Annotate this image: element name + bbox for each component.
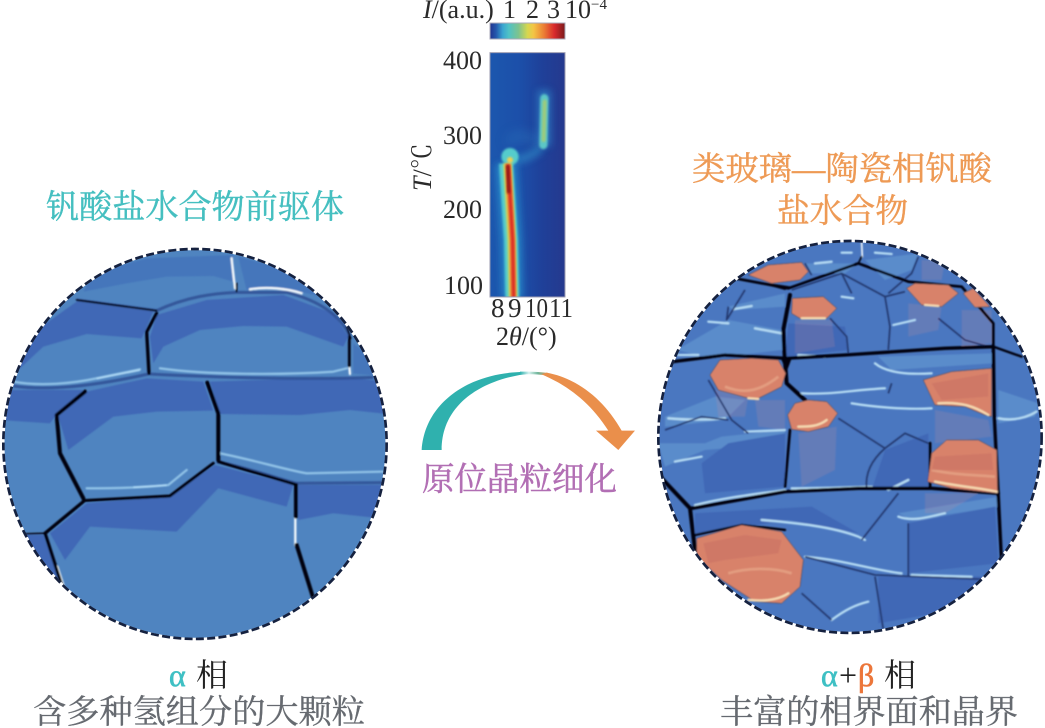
left caption: alpha phase: [33, 657, 365, 728]
x axis labels: 2θ/(°): [496, 322, 557, 351]
process label: 原位晶粒细化: [422, 461, 617, 498]
right title: [692, 151, 993, 230]
bright grain rims: [13, 368, 383, 488]
x axis labels: 10: [525, 293, 548, 323]
right caption: alpha+beta phase: 相: [884, 657, 916, 693]
y axis labels: [408, 46, 483, 300]
y axis labels: 200: [443, 195, 482, 224]
left caption: alpha phase: 相: [196, 657, 228, 693]
arrow: curved teal to orange: [422, 372, 635, 450]
colorbar legend: [422, 0, 607, 39]
black grain boundaries: [25, 283, 351, 598]
heatmap chart: [408, 46, 565, 300]
x axis labels: 11: [549, 293, 573, 323]
right caption: alpha+beta phase: [720, 657, 1018, 728]
black grain boundaries: [662, 257, 1022, 563]
x axis labels: [491, 293, 573, 351]
right title: 盐水合物: [777, 193, 908, 230]
panel: alpha phase large grains circle: [0, 248, 390, 640]
shaded edges below grains: [13, 292, 383, 483]
translucent pink shafts below beta grains: [715, 260, 992, 513]
panel: alpha+beta refined grains circle: [658, 240, 1042, 640]
darker grain facets: [0, 295, 387, 583]
right title: 类玻璃—陶瓷相钒酸: [692, 151, 993, 188]
beta phase orange grains: [697, 262, 998, 603]
right caption: alpha+beta phase: α: [821, 657, 838, 693]
right caption: alpha+beta phase: β: [858, 657, 874, 693]
x axis labels: 9: [508, 293, 522, 323]
y axis labels: 300: [443, 121, 482, 150]
thin secondary grain boundaries: [665, 257, 998, 640]
y axis labels: 100: [444, 271, 483, 300]
x axis labels: 8: [491, 293, 504, 323]
left caption: alpha phase: α: [169, 657, 186, 693]
left title: 钒酸盐水合物前驱体: [46, 189, 344, 226]
y axis labels: T/℃: [408, 143, 437, 191]
y axis labels: 400: [443, 46, 482, 75]
right caption: alpha+beta phase: +: [839, 657, 857, 693]
lighter and darker grain facets: [658, 253, 1038, 520]
bright grain highlights: [668, 243, 1037, 620]
beta grain shading: [748, 305, 997, 601]
